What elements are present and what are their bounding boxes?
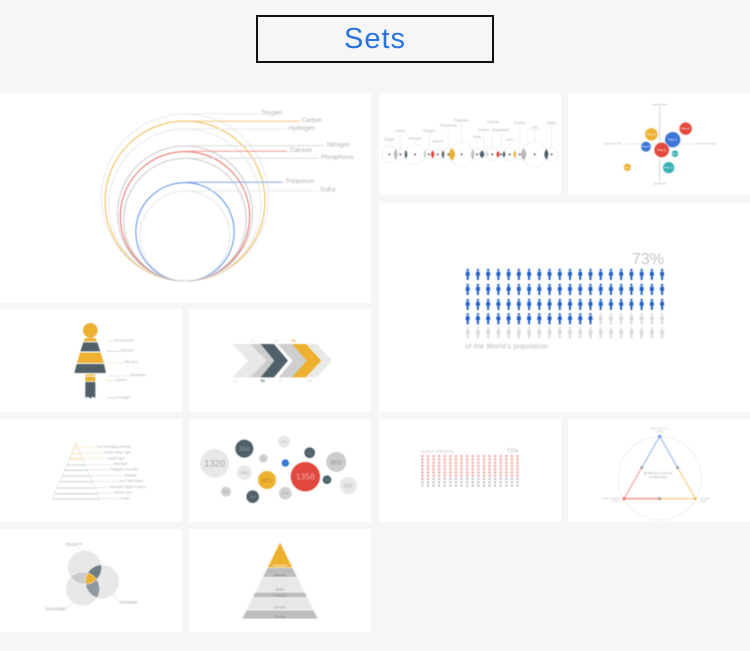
compass labels: Libertarian: [653, 181, 666, 185]
pyramid labels: Russia: [275, 615, 285, 619]
bubble values: 299: [249, 494, 257, 499]
orbit labels: Calcium: [432, 140, 444, 144]
panel: element orbit row: [379, 93, 561, 195]
bubble values: 346: [240, 470, 249, 475]
bubble values: 902: [331, 459, 342, 466]
figure labels: Nitrogen: [124, 360, 138, 364]
panel: human body composition: [0, 309, 182, 412]
venn labels and leaders: Research: [66, 541, 83, 546]
bubble values: 302: [282, 491, 289, 496]
title: Sets: [344, 23, 406, 55]
element labels: Carbon: [302, 117, 322, 124]
element labels: Oxygen: [261, 109, 282, 116]
figure labels: [114, 339, 146, 399]
compass labels: Economic Left: [604, 142, 621, 146]
orbit labels: Magnesium: [493, 128, 510, 132]
chevron values: 80: [292, 339, 296, 343]
bubble values: 301: [281, 439, 288, 444]
compass labels: Party H: [623, 165, 632, 169]
pyramid labels: France: [275, 594, 285, 598]
chart: nested circles: [102, 114, 324, 281]
element labels: [261, 109, 354, 194]
triangle labels: LEVEL: [612, 500, 620, 503]
figure labels: Hydrogen: [130, 373, 146, 377]
species labels: Dhole: [121, 496, 129, 500]
species labels: Philippine Crocodile: [110, 468, 138, 472]
figure leaders: [107, 341, 129, 398]
panel: venn diagram: [0, 529, 182, 632]
triangle labels: MORPHOLOGICAL: [643, 472, 673, 476]
orbit labels: Sulfur: [473, 135, 481, 139]
triangle: [624, 436, 695, 499]
bubble values: 832: [344, 483, 353, 489]
element labels: Nitrogen: [327, 142, 350, 148]
compass labels: Economic Right: [697, 142, 716, 146]
element labels: Sulfur: [320, 186, 336, 194]
element labels: Phosphorus: [321, 154, 354, 161]
chevron values: 43: [308, 379, 312, 383]
chevron values: 21: [251, 339, 255, 343]
panel: chevron process: [189, 309, 371, 412]
pyramid labels: Romania: [273, 563, 287, 567]
compass labels: Party F: [671, 152, 680, 156]
species labels: Iberian Lynx: [115, 491, 132, 495]
triangle labels: LEVEL: [700, 500, 708, 503]
chart: orbits: [381, 118, 559, 167]
panel: country pyramid: [189, 529, 371, 632]
orbit labels: Potassium: [454, 118, 469, 122]
pyramid labels: [273, 563, 287, 619]
compass labels: Party D: [642, 145, 651, 149]
orbit labels: Zinc: [532, 126, 538, 130]
pyramid outline and bands: [52, 443, 123, 499]
compass labels: Party C: [668, 138, 677, 142]
species labels: Golden Tabby Tiger: [104, 451, 131, 455]
venn labels and leaders: [46, 541, 137, 611]
bubble values: 150: [224, 490, 229, 494]
chevrons: [233, 344, 332, 377]
orbit labels: Hydrogen: [408, 136, 422, 140]
compass labels: [604, 103, 716, 185]
compass labels: Party A: [681, 127, 690, 131]
bubble values: 854: [239, 447, 250, 453]
orbit labels: Silicon: [547, 121, 557, 125]
figure labels: Calcium: [120, 349, 133, 353]
triangle labels: OVERVIEW: [649, 476, 668, 480]
compass labels: Party G: [664, 166, 673, 170]
element labels: Potassium: [286, 178, 314, 185]
orbit labels: Fluorine: [514, 121, 526, 125]
chart: compass: [604, 103, 716, 185]
venn labels and leaders: Knowledge: [46, 606, 66, 611]
element labels: Calcium: [290, 147, 312, 154]
pyramid labels: Sweden: [274, 573, 286, 577]
pyramid labels: Spain: [276, 588, 285, 592]
venn circles: [66, 550, 119, 606]
venn labels and leaders: Emotions: [121, 599, 137, 604]
chevron values: 27: [279, 379, 283, 383]
orbit labels: [384, 118, 557, 144]
figure labels: Oxygen: [118, 395, 131, 399]
chevron values: [233, 339, 312, 383]
pyramid labels: Ukraine: [274, 606, 286, 610]
panel: endangered species pyramid: [0, 419, 182, 522]
panel: political compass bubbles: [568, 93, 750, 195]
panel: 73 percent population pictogram: [379, 203, 750, 412]
species labels: [96, 445, 146, 500]
species labels: Sea Turtle Shrew: [119, 479, 144, 483]
species labels: Tamaraw: [124, 473, 138, 477]
chevron values: 32: [275, 339, 279, 343]
figure labels: Carbon: [115, 378, 127, 382]
orbit labels: Nitrogen: [423, 129, 435, 133]
species labels: Red Wolf: [114, 462, 127, 466]
species labels: The Pinta Island Tortoise: [96, 445, 131, 449]
panel: triangle diagram: [568, 419, 750, 522]
chevron values: 53: [261, 379, 265, 383]
triangle labels: INTELLIGENCE: [602, 497, 621, 500]
markers: [623, 435, 697, 500]
element labels: Hydrogen: [288, 125, 315, 132]
panel: system efficiency dot grid: [379, 419, 561, 522]
orbit labels: Chlorine: [487, 120, 499, 124]
title: [256, 15, 494, 63]
bubble values: 88: [325, 478, 329, 482]
compass labels: Authoritarian: [652, 103, 668, 107]
panel: number bubbles: [189, 419, 371, 522]
percent figure: 71%: [507, 449, 518, 455]
panel: nested element circles: [0, 93, 371, 303]
orbit labels: Oxygen: [384, 137, 395, 141]
icon: striped figure: [74, 323, 106, 399]
bubble values: 94: [262, 457, 265, 461]
compass labels: Party E: [657, 148, 666, 152]
bubble values: 801: [262, 478, 273, 484]
bubbles: [200, 436, 357, 503]
triangle labels: LEVEL: [656, 431, 664, 434]
triangle labels: SYSTEM: [700, 497, 710, 500]
triangle labels: [602, 428, 710, 503]
bubble values: 20: [284, 461, 287, 465]
pictogram grid: [465, 269, 664, 338]
pyramid layers: [242, 543, 318, 619]
chevron values: 10: [233, 379, 237, 383]
bubble values: 1356: [296, 472, 315, 482]
species labels: Napali Tiger: [108, 456, 125, 460]
species labels: Mountain Pygmy Possum: [110, 485, 146, 489]
caption: of the World's population: [465, 341, 549, 350]
compass labels: Party B: [647, 132, 656, 136]
orbit labels: Carbon: [395, 129, 406, 133]
bubble values: 211: [307, 451, 312, 455]
triangle labels: INFORMATION: [651, 428, 668, 431]
figure labels: Phosphorus: [114, 339, 134, 343]
orbit labels: Iron: [507, 137, 513, 141]
dot grid: [421, 456, 519, 486]
bubble values: 1320: [204, 459, 225, 469]
percent figure: 73%: [632, 251, 664, 268]
ring: [618, 437, 701, 520]
heading: System Efficiency: [421, 449, 454, 454]
orbit labels: Phosphorus: [440, 123, 457, 127]
orbit labels: Sodium: [478, 128, 489, 132]
bubble values: [204, 439, 353, 499]
